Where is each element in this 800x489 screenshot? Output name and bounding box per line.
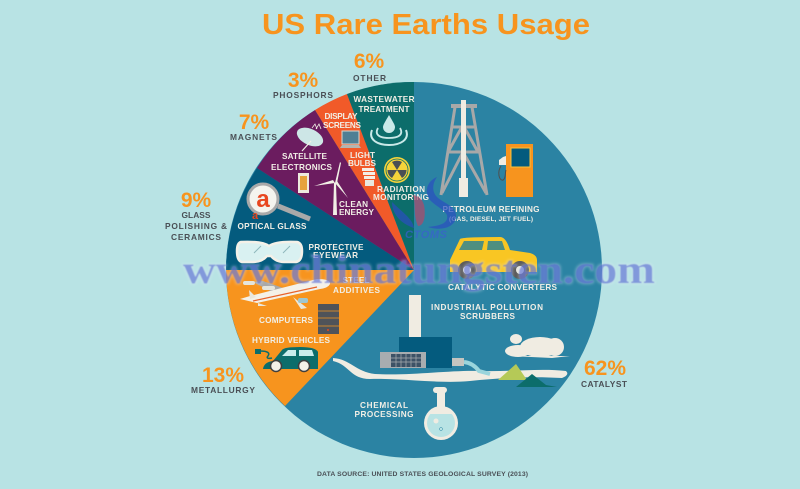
icon: magnifying glass: a (252, 210, 259, 222)
icon: satellite dish (294, 124, 326, 151)
icon: server (318, 304, 339, 334)
icon: radiation (384, 157, 410, 183)
display screens: SCREENS (323, 121, 362, 130)
industrial pollution scrubbers: INDUSTRIAL POLLUTION (431, 303, 543, 312)
label: 62% catalyst (581, 357, 628, 389)
clean energy: CLEAN (339, 200, 368, 209)
label: 6% other: 6% (354, 50, 384, 73)
optical glass: OPTICAL GLASS (238, 222, 307, 231)
satellite electronics: ELECTRONICS (271, 163, 333, 172)
display screens (323, 112, 362, 130)
protective eyewear: EYEWEAR (313, 251, 358, 260)
radiation monitoring: RADIATION (377, 185, 425, 194)
radiation monitoring: MONITORING (373, 193, 429, 202)
label: 3% phosphors (273, 69, 333, 100)
satellite electronics (271, 152, 333, 172)
icon: river (333, 358, 567, 382)
label: 9% glass polishing and ceramics: CERAMICS (171, 232, 221, 242)
catalytic converters: CATALYTIC CONVERTERS (448, 283, 558, 292)
steel additives (333, 276, 381, 295)
label: 9% glass polishing and ceramics (165, 189, 227, 242)
label: 13% metallurgy: METALLURGY (191, 385, 255, 395)
protective eyewear: PROTECTIVE (308, 243, 364, 252)
icon: fuel pump (499, 144, 533, 197)
icon: yellow car (450, 237, 537, 279)
computers: COMPUTERS (259, 316, 314, 325)
chemical processing: CHEMICAL (360, 401, 408, 410)
label: 9% glass polishing and ceramics: GLASS (182, 210, 211, 220)
label: 6% other (353, 50, 386, 83)
label: 7% magnets: 7% (239, 111, 269, 134)
label: 6% other: OTHER (353, 73, 386, 83)
wastewater treatment: WASTEWATER (354, 95, 415, 104)
protective eyewear (308, 243, 364, 260)
pie chart (226, 82, 602, 458)
industrial pollution scrubbers: SCRUBBERS (460, 312, 516, 321)
chemical processing: PROCESSING (354, 410, 414, 419)
label: 7% magnets (230, 111, 277, 142)
light bulbs (348, 151, 377, 168)
radiation monitoring (373, 185, 429, 202)
label: 13% metallurgy: 13% (202, 364, 244, 387)
label: 9% glass polishing and ceramics: 9% (181, 189, 211, 212)
icon: goggles (237, 242, 302, 262)
icon: hills (498, 364, 557, 387)
title: US Rare Earths Usage (262, 9, 590, 41)
light bulbs: LIGHT (350, 151, 375, 160)
chemical processing (354, 401, 414, 419)
label: 13% metallurgy (191, 364, 255, 395)
label: 62% catalyst: 62% (584, 357, 626, 380)
icon: oil derrick (441, 100, 487, 197)
icon: water drop (371, 115, 407, 145)
label: 7% magnets: MAGNETS (230, 132, 277, 142)
label: 3% phosphors: 3% (288, 69, 318, 92)
industrial pollution scrubbers (431, 303, 543, 321)
steel additives: ADDITIVES (333, 286, 381, 295)
satellite electronics: SATELLITE (282, 152, 328, 161)
hybrid vehicles: HYBRID VEHICLES (252, 336, 331, 345)
icon: factory (380, 295, 490, 374)
label: 62% catalyst: CATALYST (581, 379, 628, 389)
label: 3% phosphors: PHOSPHORS (273, 90, 333, 100)
ctoms watermark logo (392, 177, 456, 241)
icon: light bulb (362, 168, 375, 186)
icon: airplane (240, 279, 330, 309)
petroleum refining: (GAS, DIESEL, JET FUEL) (449, 216, 533, 223)
icon: circuit board (298, 173, 309, 193)
wastewater treatment (354, 95, 415, 114)
petroleum refining (442, 205, 540, 223)
display screens: DISPLAY (324, 112, 358, 121)
icon: magnifying glass (248, 184, 310, 222)
icon: hybrid car (255, 347, 318, 372)
website watermark: www.chinatungsten.com (183, 247, 655, 292)
clean energy: ENERGY (339, 208, 375, 217)
data source: DATA SOURCE: UNITED STATES GEOLOGICAL SURVEY (2013) (317, 471, 528, 478)
label: 9% glass polishing and ceramics: POLISHING & (165, 221, 227, 231)
steel additives: STEEL (342, 276, 370, 285)
petroleum refining: PETROLEUM REFINING (442, 205, 540, 214)
icon: wind turbine (314, 162, 348, 215)
light bulbs: BULBS (348, 159, 377, 168)
icon: cloud (505, 334, 570, 358)
ctoms watermark logo: CTOMS (405, 229, 448, 241)
icon: flask (424, 387, 458, 440)
icon: laptop (340, 131, 361, 148)
wastewater treatment: TREATMENT (358, 105, 410, 114)
icon: magnifying glass: a (256, 186, 270, 213)
clean energy (339, 200, 375, 217)
